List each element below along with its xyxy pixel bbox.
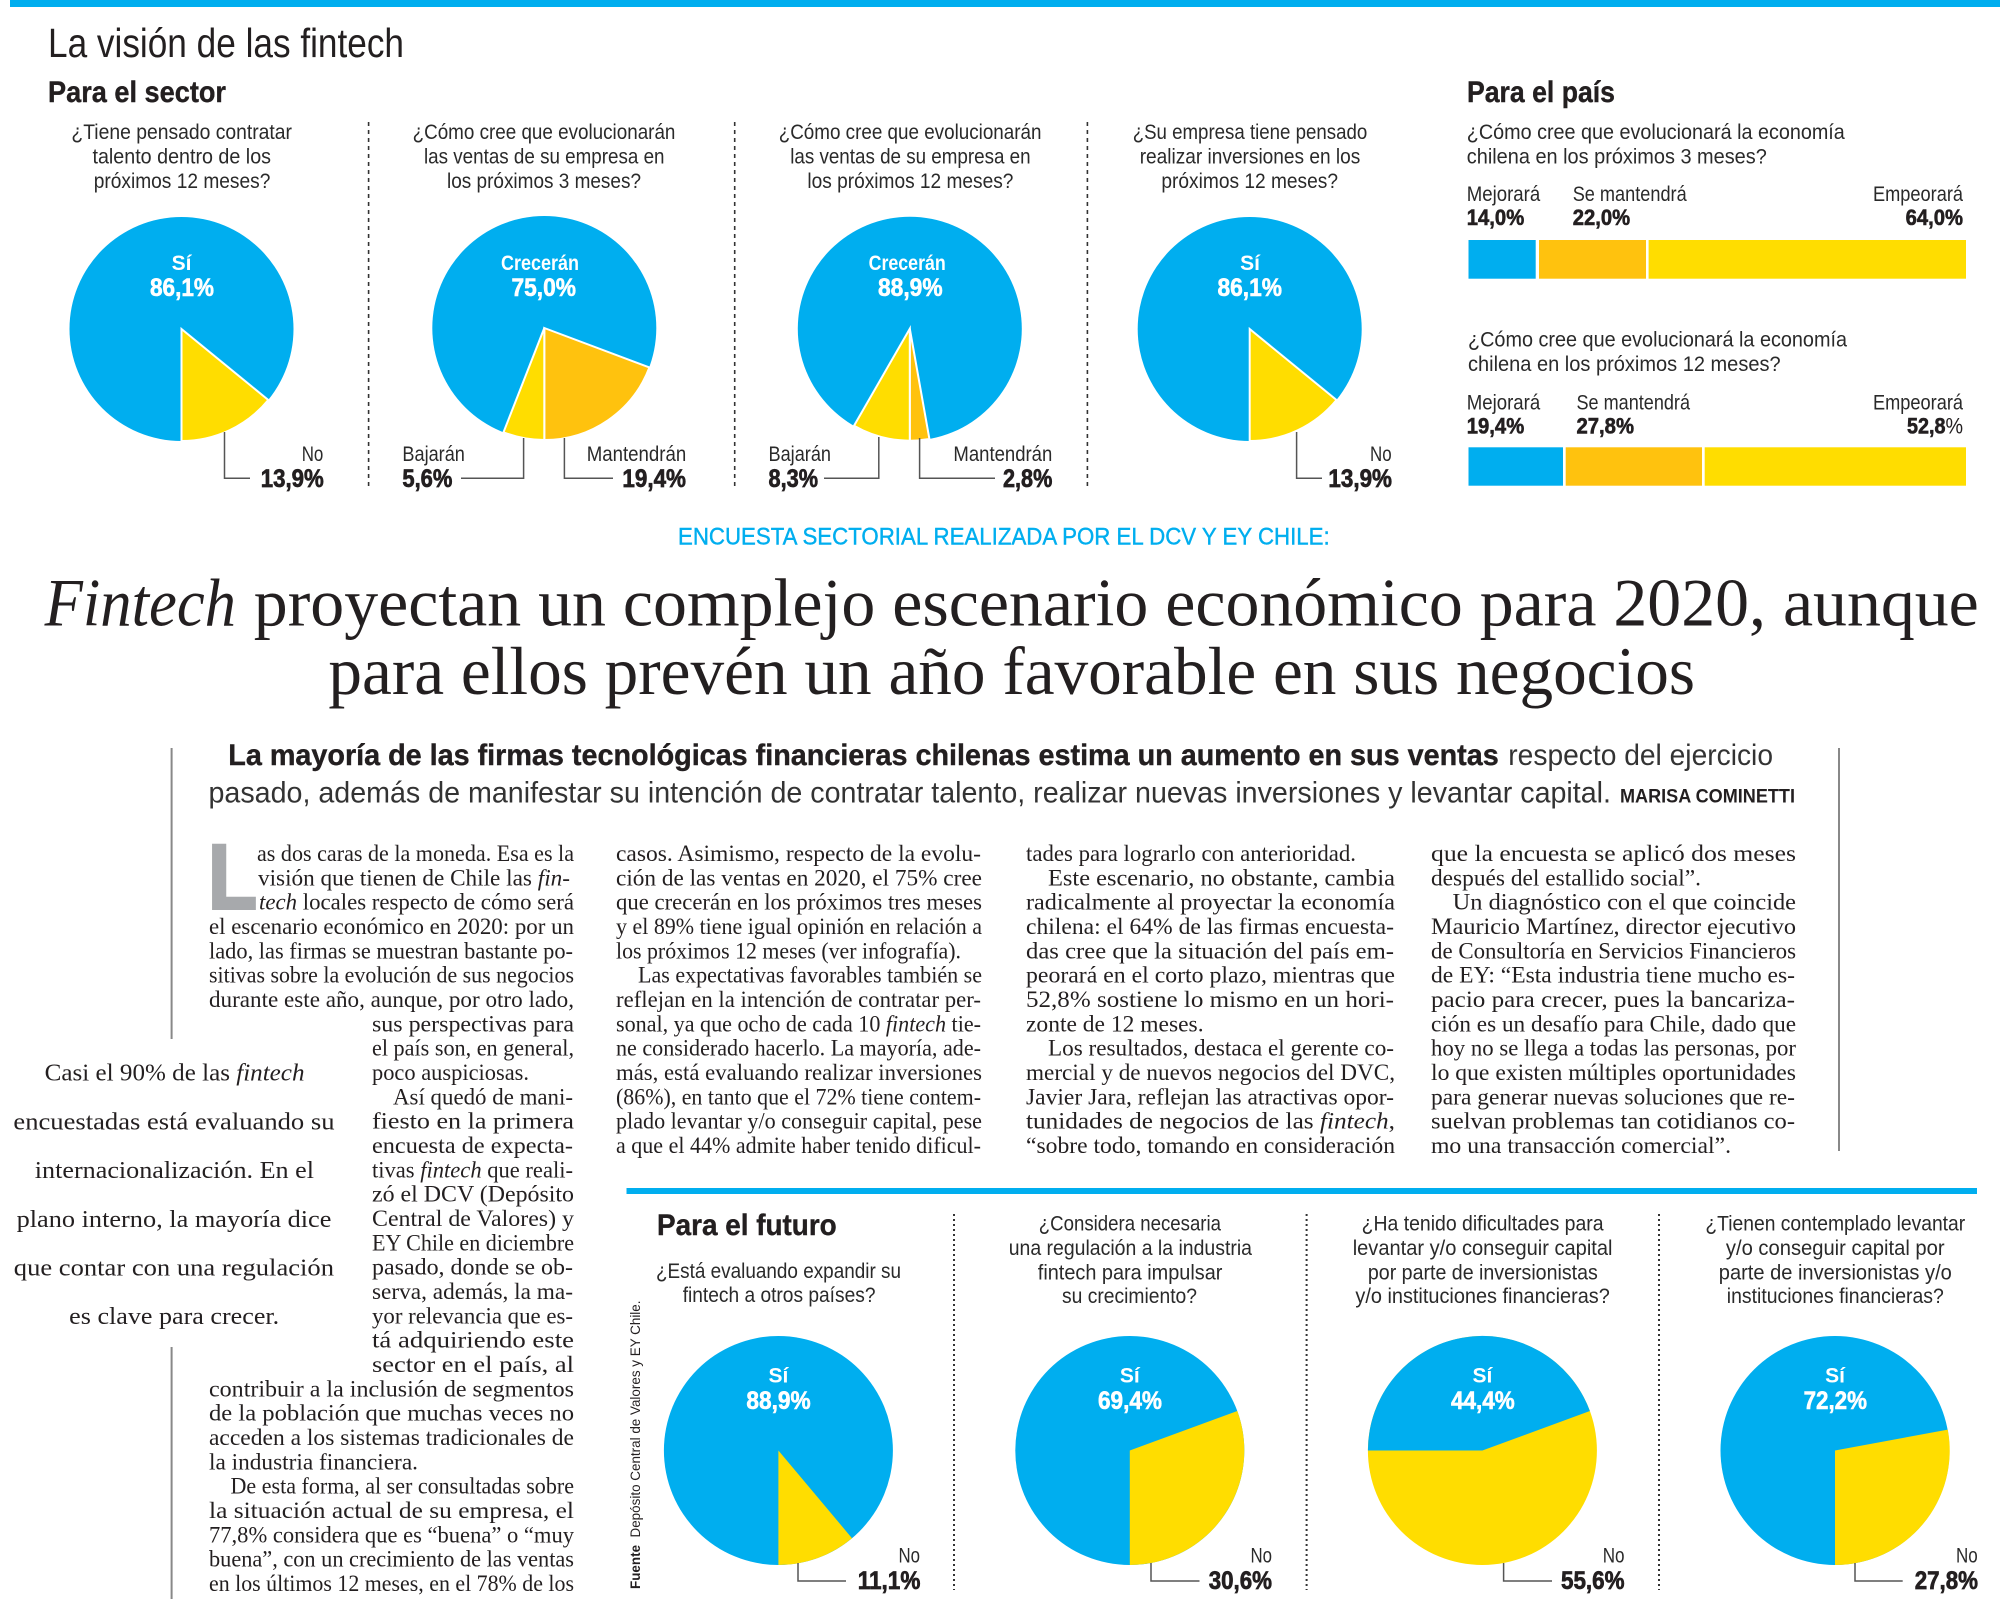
article column 3: peorará en el corto plazo, mientras que	[1026, 963, 1395, 988]
article column 3: Los resultados, destaca el gerente co-	[1048, 1036, 1394, 1061]
article column 1: tá adquiriendo este	[372, 1328, 574, 1353]
article column 4: mo una transacción comercial”.	[1431, 1133, 1731, 1158]
kicker: ENCUESTA SECTORIAL REALIZADA POR EL DCV Y EY CHILE:	[678, 523, 1330, 550]
infographic title: La visión de las fintech	[48, 20, 404, 66]
deck: La mayoría de las firmas tecnológicas financieras chilenas estima un aumento en sus ventas	[228, 739, 1499, 772]
panel: economía 12 meses	[1467, 329, 1966, 486]
article column 2: ne considerado hacerlo. La mayoría, ade-	[616, 1036, 981, 1061]
pull quote	[13, 1060, 334, 1330]
callout: No 27,8%: No	[1956, 1544, 1978, 1568]
labels: economía 3 meses: Se mantendrá	[1573, 183, 1687, 206]
panel: expandir a otros países	[656, 1260, 920, 1595]
deck: pasado, además de manifestar su intención de contratar talento, realizar nuevas inversiones y levantar capital.	[208, 777, 1611, 810]
article column 4: lo que existen múltiples oportunidades	[1431, 1060, 1796, 1085]
article column 3: “sobre todo, tomando en consideración	[1026, 1133, 1396, 1158]
labels: economía 3 meses: Empeorará	[1873, 183, 1963, 206]
deck	[208, 739, 1795, 810]
question: ventas 12 meses: las ventas de su empresa en	[790, 146, 1031, 168]
top blue rule	[10, 0, 2000, 7]
panel: dificultades capital	[1353, 1213, 1624, 1595]
article column 1: 77,8% considera que es “buena” o “muy	[209, 1522, 574, 1547]
pull quote: plano interno, la mayoría dice	[17, 1207, 331, 1233]
callout: Bajarán 8,3%: 8,3%	[768, 465, 818, 493]
callout: No 13,9%: No	[302, 443, 323, 466]
callout: Bajarán 5,6%	[402, 438, 524, 493]
question: expandir: ¿Está evaluando expandir su	[656, 1260, 901, 1283]
question: inversiones: realizar inversiones en los	[1140, 146, 1360, 168]
headline: para ellos prevén un año favorable en sus negocios	[328, 633, 1695, 709]
source note: Fuente Depósito Central de Valores y EY Chile.	[628, 1300, 643, 1589]
question: levantar capital	[1705, 1213, 1965, 1308]
question: economía 3 meses	[1467, 121, 1845, 168]
article column 2: Las expectativas favorables también se	[638, 963, 982, 988]
question: expandir: fintech a otros países?	[683, 1284, 876, 1307]
callout: No 27,8%	[1855, 1544, 1978, 1595]
callout: Mantendrán 19,4%	[564, 438, 686, 493]
article column 3: radicalmente al proyectar la economía	[1026, 890, 1395, 915]
question: contratar talento: próximos 12 meses?	[94, 170, 270, 193]
article column 1: el país son, en general,	[372, 1036, 574, 1061]
question: levantar capital: ¿Tienen contemplado levantar	[1705, 1213, 1965, 1236]
deck: MARISA COMINETTI	[1620, 787, 1795, 808]
article column 4	[1431, 841, 1796, 1158]
article column 1: sus perspectivas para	[372, 1011, 574, 1036]
article column 4: suelvan problemas tan cotidianos co-	[1431, 1109, 1795, 1134]
article column 4: Mauricio Martínez, director ejecutivo	[1431, 914, 1796, 939]
article column 1: EY Chile en diciembre	[372, 1230, 574, 1255]
pie chart: ventas 12 meses	[798, 217, 1022, 441]
article column 1: zó el DCV (Depósito	[372, 1182, 574, 1207]
callout: No 30,6%	[1151, 1544, 1272, 1595]
pull quote: Casi el 90% de las fintech	[45, 1060, 304, 1086]
labels: economía 12 meses	[1467, 392, 1963, 438]
question: contratar talento	[71, 121, 292, 193]
panel: economía 3 meses	[1467, 121, 1966, 279]
article column 2	[616, 841, 982, 1158]
article column 1: visión que tienen de Chile las fin-	[258, 865, 570, 890]
labels: economía 12 meses: 52,8%	[1907, 413, 1963, 438]
heading: Para el sector: Para el sector	[48, 76, 226, 109]
labels: economía 3 meses	[1467, 183, 1963, 230]
article column 2: sonal, ya que ocho de cada 10 fintech tie-	[616, 1011, 981, 1036]
callout: No 55,6%	[1504, 1544, 1624, 1595]
pie chart: levantar capital	[1720, 1336, 1950, 1565]
callout: No 55,6%: No	[1603, 1544, 1624, 1568]
panel: levantar capital	[1705, 1213, 1978, 1595]
question: regulación: ¿Considera necesaria	[1039, 1213, 1221, 1236]
pie chart: contratar talento: Sí	[172, 252, 193, 275]
question: economía 3 meses: ¿Cómo cree que evolucionará la economía	[1467, 121, 1845, 144]
stacked bar: economía 3 meses	[1468, 240, 1966, 279]
question: levantar capital: instituciones financieras?	[1727, 1285, 1944, 1308]
callout: No 13,9%	[1297, 432, 1392, 493]
article column 1: encuesta de expecta-	[372, 1133, 573, 1158]
question: expandir	[656, 1260, 901, 1307]
labels: economía 3 meses: 14,0%	[1467, 205, 1524, 230]
labels: economía 12 meses: 19,4%	[1467, 413, 1524, 438]
article column 3: das cree que la situación del país em-	[1026, 938, 1394, 963]
question: regulación: una regulación a la industria	[1009, 1237, 1252, 1260]
article column 2: reflejan en la intención de contratar per-	[616, 987, 981, 1012]
question: economía 12 meses: chilena en los próximos 12 meses?	[1468, 353, 1781, 376]
question: regulación	[1009, 1213, 1252, 1308]
pie chart: inversiones: 86,1%	[1218, 274, 1282, 302]
article column 2: y el 89% tiene igual opinión en relación a	[616, 914, 982, 939]
article column 1: el escenario económico en 2020: por un	[209, 914, 574, 939]
headline: proyectan un complejo escenario económico para 2020, aunque	[254, 565, 1979, 641]
pie chart: inversiones	[1138, 217, 1362, 441]
callout: No 55,6%: 55,6%	[1561, 1567, 1624, 1595]
question: contratar talento: talento dentro de los	[92, 146, 271, 168]
callout: No 13,9%: 13,9%	[1328, 465, 1392, 493]
article column 1: Así quedó de mani-	[393, 1084, 573, 1109]
article column 1: lado, las firmas se muestran bastante po-	[209, 938, 573, 963]
pie chart: contratar talento	[70, 217, 294, 441]
pie chart: inversiones: Sí	[1240, 252, 1261, 275]
article column 3: tades para lograrlo con anterioridad.	[1026, 841, 1356, 866]
callout: Mantendrán 19,4%: 19,4%	[622, 465, 686, 493]
article column 3: Javier Jara, reflejan las atractivas opor-	[1026, 1084, 1394, 1109]
pie chart: contratar talento: 86,1%	[150, 274, 214, 302]
article column 4: ción es un desafío para Chile, dado que	[1431, 1011, 1796, 1036]
pie chart: regulación: 69,4%	[1098, 1387, 1162, 1415]
question: regulación: fintech para impulsar	[1038, 1261, 1222, 1284]
article column 1: yor relevancia que es-	[372, 1303, 573, 1328]
article column 2: los próximos 12 meses (ver infografía).	[616, 938, 961, 963]
labels: economía 3 meses: 64,0%	[1906, 205, 1963, 230]
question: ventas 12 meses: ¿Cómo cree que evolucionarán	[779, 121, 1042, 144]
question: economía 12 meses	[1468, 329, 1847, 376]
question: ventas 3 meses: ¿Cómo cree que evolucionarán	[413, 121, 675, 144]
question: economía 3 meses: chilena en los próximos 3 meses?	[1467, 146, 1767, 168]
article column 1: De esta forma, al ser consultadas sobre	[230, 1474, 574, 1499]
pie chart: expandir	[664, 1336, 893, 1565]
question: ventas 12 meses	[779, 121, 1042, 193]
callout: Mantendrán 2,8%	[920, 438, 1052, 493]
article column 2: plado levantar y/o conseguir capital, pese	[616, 1109, 982, 1134]
callout: No 13,9%	[224, 432, 324, 493]
labels: economía 3 meses: 22,0%	[1573, 205, 1630, 230]
article column 3	[1026, 841, 1396, 1158]
article column 1: sitivas sobre la evolución de sus negocios	[209, 963, 574, 988]
article column 3: 52,8% sostiene lo mismo en un hori-	[1026, 987, 1394, 1012]
pie chart: ventas 3 meses: 75,0%	[512, 274, 576, 302]
pie chart: ventas 3 meses: Crecerán	[501, 252, 579, 275]
stacked bar: economía 12 meses	[1468, 447, 1966, 486]
question: ventas 3 meses	[413, 121, 675, 193]
callout: No 11,1%: 11,1%	[858, 1567, 920, 1595]
question: dificultades capital: por parte de inversionistas	[1368, 1261, 1598, 1284]
article column 1: pasado, donde se ob-	[372, 1255, 573, 1280]
labels: economía 12 meses: Mejorará	[1467, 392, 1540, 415]
article column 1: poco auspiciosas.	[372, 1060, 529, 1085]
article column 1: contribuir a la inclusión de segmentos	[209, 1376, 574, 1401]
pie chart: ventas 12 meses: Crecerán	[869, 252, 946, 275]
labels: economía 12 meses: Se mantendrá	[1576, 392, 1690, 415]
callout: Mantendrán 2,8%: Mantendrán	[953, 443, 1052, 466]
question: dificultades capital: y/o instituciones financieras?	[1355, 1285, 1610, 1308]
pie chart: expandir: 88,9%	[746, 1387, 811, 1415]
question: dificultades capital	[1353, 1213, 1612, 1308]
pie chart: dificultades capital: 44,4%	[1451, 1387, 1515, 1415]
pie chart: ventas 3 meses	[432, 216, 656, 440]
article column 1: en los últimos 12 meses, en el 78% de los	[209, 1571, 574, 1596]
article column 4: que la encuesta se aplicó dos meses	[1431, 841, 1796, 866]
drop cap: L	[208, 826, 257, 928]
question: inversiones: próximos 12 meses?	[1161, 170, 1338, 193]
headline: Fintech	[44, 565, 236, 641]
article column 1: durante este año, aunque, por otro lado,	[209, 987, 574, 1012]
question: economía 12 meses: ¿Cómo cree que evolucionará la economía	[1468, 329, 1847, 352]
article column 2: (86%), en tanto que el 72% tiene contem-	[616, 1084, 981, 1109]
pie chart: levantar capital: Sí	[1825, 1364, 1846, 1388]
pie chart: ventas 12 meses: 88,9%	[878, 274, 943, 302]
pie chart: regulación: Sí	[1120, 1364, 1141, 1388]
question: dificultades capital: ¿Ha tenido dificultades para	[1362, 1213, 1604, 1236]
article column 1: la industria financiera.	[209, 1449, 418, 1474]
article column 2: casos. Asimismo, respecto de la evolu-	[616, 841, 981, 866]
article column 4: hoy no se llega a todas las personas, por	[1431, 1036, 1796, 1061]
article column 4: de Consultoría en Servicios Financieros	[1431, 938, 1796, 963]
question: ventas 3 meses: los próximos 3 meses?	[447, 170, 641, 193]
callout: No 30,6%: No	[1250, 1544, 1272, 1568]
article column 4: Un diagnóstico con el que coincide	[1453, 890, 1796, 915]
question: inversiones	[1133, 121, 1367, 193]
callout: Bajarán 8,3%: Bajarán	[768, 443, 831, 466]
article column 1: la situación actual de su empresa, el	[209, 1498, 574, 1523]
article column 1: serva, además, la ma-	[372, 1279, 573, 1304]
article column 4: después del estallido social”.	[1431, 865, 1701, 890]
callout: No 27,8%: 27,8%	[1915, 1567, 1978, 1595]
callout: Bajarán 8,3%	[768, 437, 879, 493]
article column 1: de la población que muchas veces no	[209, 1401, 574, 1426]
article column 4: pacio para crecer, pues la bancariza-	[1431, 987, 1795, 1012]
article column 1	[209, 841, 575, 1596]
pie chart: dificultades capital: Sí	[1472, 1364, 1493, 1388]
article column 3: zonte de 12 meses.	[1026, 1011, 1204, 1036]
article column 4: para generar nuevas soluciones que re-	[1431, 1084, 1795, 1109]
article column 1: Central de Valores) y	[372, 1206, 575, 1231]
labels: economía 12 meses: 27,8%	[1576, 413, 1634, 438]
callout: Mantendrán 2,8%: 2,8%	[1003, 465, 1052, 493]
panel: inversiones	[1133, 121, 1392, 493]
labels: economía 12 meses: Empeorará	[1873, 392, 1963, 415]
pie chart: levantar capital: 72,2%	[1804, 1387, 1867, 1415]
article column 2: que crecerán en los próximos tres meses	[616, 890, 982, 915]
panel: ventas 12 meses	[768, 121, 1052, 493]
article column 2: más, está evaluando realizar inversiones	[616, 1060, 982, 1085]
question: dificultades capital: levantar y/o conseguir capital	[1353, 1237, 1612, 1260]
callout: No 11,1%	[798, 1544, 920, 1595]
question: ventas 12 meses: los próximos 12 meses?	[807, 170, 1013, 193]
pull quote: encuestadas está evaluando su	[13, 1110, 334, 1136]
article column 1: tech locales respecto de cómo será	[259, 890, 574, 915]
callout: No 13,9%: No	[1370, 443, 1392, 466]
pie chart: regulación	[1015, 1336, 1244, 1565]
callout: No 13,9%: 13,9%	[261, 465, 324, 493]
pie chart: expandir: Sí	[768, 1364, 789, 1388]
article column 1: buena”, con un crecimiento de las ventas	[209, 1547, 574, 1572]
article column 3: chilena: el 64% de las firmas encuesta-	[1026, 914, 1394, 939]
question: regulación: su crecimiento?	[1062, 1285, 1197, 1308]
article column 1: as dos caras de la moneda. Esa es la	[257, 841, 574, 866]
article column 1: sector en el país, al	[372, 1352, 574, 1377]
deck: respecto del ejercicio	[1508, 739, 1773, 772]
panel: regulación	[1009, 1213, 1272, 1595]
pie chart: dificultades capital	[1368, 1336, 1597, 1565]
question: ventas 3 meses: las ventas de su empresa en	[424, 146, 664, 168]
article column 3: Este escenario, no obstante, cambia	[1048, 865, 1395, 890]
question: levantar capital: y/o conseguir capital por	[1726, 1237, 1945, 1260]
callout: Bajarán 5,6%: 5,6%	[402, 465, 452, 493]
article column 4: de EY: “Esta industria tiene mucho es-	[1431, 963, 1795, 988]
article column 2: a que el 44% admite haber tenido dificul-	[616, 1133, 981, 1158]
article column 3: tunidades de negocios de las fintech ,	[1026, 1109, 1395, 1134]
article column 2: ción de las ventas en 2020, el 75% cree	[616, 865, 982, 890]
article column 3: mercial y de nuevos negocios del DVC,	[1026, 1060, 1395, 1085]
callout: Mantendrán 19,4%: Mantendrán	[587, 443, 686, 466]
callout: No 30,6%: 30,6%	[1209, 1567, 1272, 1595]
panel: contratar talento	[70, 121, 324, 493]
article column 1: fiesto en la primera	[372, 1109, 574, 1134]
callout: Bajarán 5,6%: Bajarán	[402, 443, 465, 466]
heading: Para el país: Para el país	[1467, 76, 1615, 109]
callout: No 11,1%: No	[898, 1544, 920, 1568]
pull quote: que contar con una regulación	[14, 1256, 334, 1282]
question: levantar capital: parte de inversionistas y/o	[1719, 1261, 1952, 1284]
pull quote: internacionalización. En el	[35, 1158, 314, 1184]
panel: ventas 3 meses	[402, 121, 686, 493]
headline	[44, 565, 1979, 709]
labels: economía 3 meses: Mejorará	[1467, 183, 1540, 206]
pull quote: es clave para crecer.	[69, 1304, 279, 1330]
question: contratar talento: ¿Tiene pensado contratar	[71, 121, 292, 144]
article column 1: tivas fintech que reali-	[372, 1157, 573, 1182]
question: inversiones: ¿Su empresa tiene pensado	[1133, 121, 1367, 144]
article column 1: acceden a los sistemas tradicionales de	[209, 1425, 574, 1450]
blue rule: Para el futuro	[626, 1188, 1977, 1194]
heading: Para el futuro: Para el futuro	[657, 1209, 837, 1242]
